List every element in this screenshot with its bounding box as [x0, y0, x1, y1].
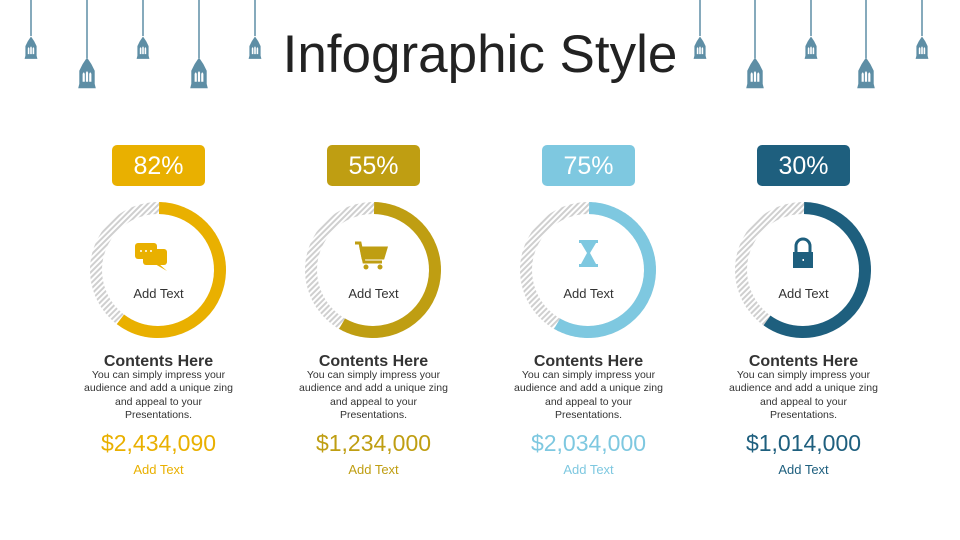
column 3: and appeal to your [545, 396, 632, 408]
badge 55%: 55% [348, 152, 399, 180]
column 2: audience and add a unique zing [299, 382, 448, 394]
amount: $1,234,000 [316, 430, 431, 456]
column 3: Presentations. [555, 409, 622, 421]
icon: chat [135, 243, 167, 271]
icon: lock [793, 239, 813, 268]
column 3 [514, 145, 663, 477]
column 2: Add Text [348, 286, 399, 301]
column 3: audience and add a unique zing [514, 382, 663, 394]
column 1 [84, 145, 233, 477]
column 4: Add Text [778, 462, 829, 477]
ring chart 2 [305, 202, 441, 338]
title: Infographic Style [283, 25, 677, 84]
column 2: Add Text [348, 462, 399, 477]
column 4: You can simply impress your [737, 369, 870, 381]
column 4: audience and add a unique zing [729, 382, 878, 394]
badge 30%: 30% [778, 152, 829, 180]
body: audience and add a unique zing [84, 382, 233, 394]
column 3: You can simply impress your [522, 369, 655, 381]
column 2 [299, 145, 448, 477]
column 4: Add Text [778, 286, 829, 301]
ring chart 4 [735, 202, 871, 338]
heading: Contents Here [319, 353, 428, 370]
column 4 [729, 145, 878, 477]
label: Add Text [133, 286, 184, 301]
column 2: You can simply impress your [307, 369, 440, 381]
badge 82%: 82% [133, 152, 184, 180]
column 3: Add Text [563, 286, 614, 301]
body: and appeal to your [115, 396, 202, 408]
column 1: Add Text [133, 462, 184, 477]
body: You can simply impress your [92, 369, 225, 381]
icon: cart [355, 243, 386, 262]
heading: Contents Here [104, 353, 213, 370]
badge 75%: 75% [563, 152, 614, 180]
ring chart 1 [90, 202, 226, 338]
badge 82% [112, 145, 205, 186]
ring chart 3 [520, 202, 656, 338]
heading: Contents Here [749, 353, 858, 370]
icon: hourglass [579, 240, 598, 267]
amount: $2,034,000 [531, 430, 646, 456]
column 2: Presentations. [340, 409, 407, 421]
column 4: Presentations. [770, 409, 837, 421]
body: Presentations. [125, 409, 192, 421]
badge 75% [542, 145, 635, 186]
badge 30% [757, 145, 850, 186]
amount: $2,434,090 [101, 430, 216, 456]
column 3: Add Text [563, 462, 614, 477]
column 4: and appeal to your [760, 396, 847, 408]
body [84, 369, 233, 421]
column 2: and appeal to your [330, 396, 417, 408]
amount: $1,014,000 [746, 430, 861, 456]
heading: Contents Here [534, 353, 643, 370]
badge 55% [327, 145, 420, 186]
lanterns decoration [24, 0, 928, 88]
